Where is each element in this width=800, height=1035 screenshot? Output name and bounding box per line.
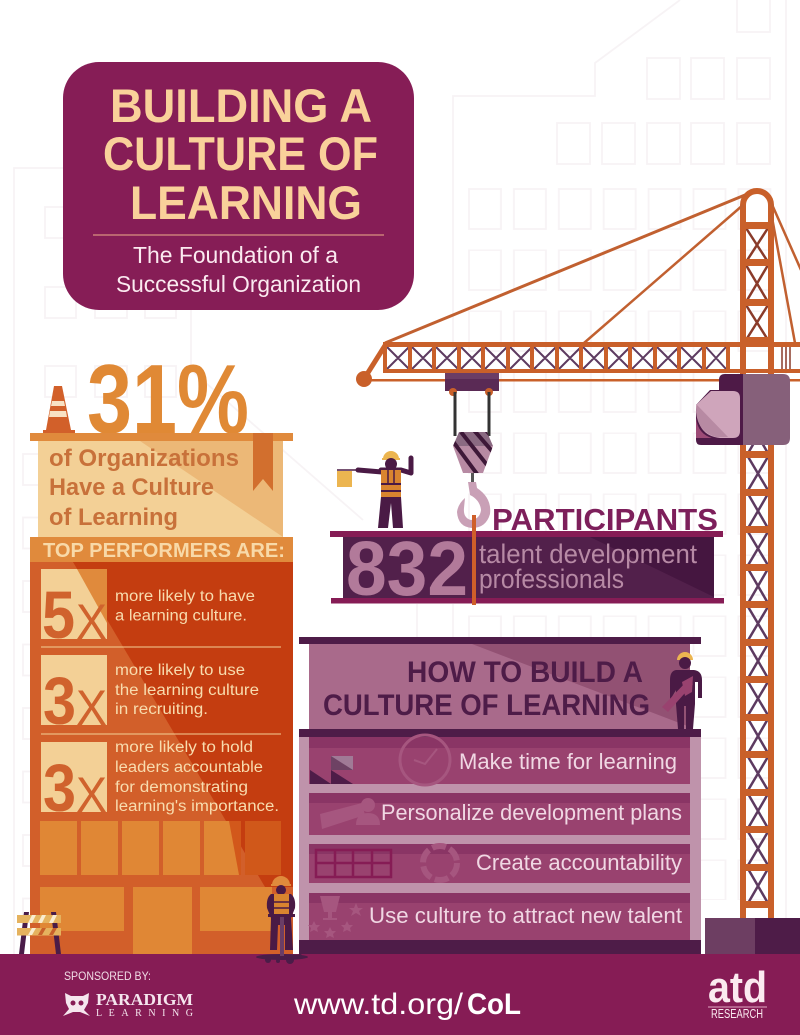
panel: top performers [30,537,293,956]
crane cab [696,374,790,445]
how-to heading: HOW TO BUILD A [407,656,643,689]
step: personalize [309,793,690,835]
step: personalize: Personalize development plans [381,800,682,825]
stat: 5x [41,569,255,653]
subtitle [116,242,361,297]
how-to heading [323,656,650,722]
tower base [705,918,800,954]
website url: CoL [467,988,521,1021]
stat: 3x leaders: 3 [43,751,76,826]
stat: 3x recruiting: the learning culture [115,682,259,699]
sponsor logo: LEARNING [96,1008,193,1019]
stat: 3x recruiting: in recruiting. [115,701,208,718]
crane jib [356,342,800,387]
website url: www.td.org/ [293,988,464,1021]
participants girder [330,502,724,612]
how-to heading: CULTURE OF LEARNING [323,689,650,722]
step: accountability [309,844,690,883]
subtitle: The Foundation of a [133,242,338,268]
stat: 5x: a learning culture. [115,608,247,624]
step: attract talent: Use culture to attract new talent [369,903,682,928]
statistic description: of Learning [49,504,178,531]
step: make time [309,735,690,785]
crane tower [743,191,773,920]
step: accountability: Create accountability [476,850,682,875]
step: make time: Make time for learning [459,749,677,774]
stat: 3x recruiting: more likely to use [115,662,245,679]
participants description: talent development [479,539,697,569]
sponsor logo: PARADIGM [96,990,193,1009]
icon: flag worker [337,451,411,528]
atd logo: atd [708,963,767,1012]
stat: 3x leaders: more likely to hold [115,739,253,756]
sponsor label: SPONSORED BY: [64,969,151,983]
title heading [103,79,378,229]
step: attract talent [308,893,690,940]
panel: 31 percent [30,344,293,537]
participants number: 832 [346,526,468,612]
title panel [63,62,414,310]
statistic description: of Organizations [49,445,239,472]
title heading: CULTURE OF [103,127,378,180]
stat: 3x recruiting [41,655,259,739]
participants heading: PARTICIPANTS [492,502,718,537]
panel: how to build [299,637,701,954]
participants description [479,539,697,594]
big statistic: 31% [87,344,249,454]
participants description: professionals [479,564,624,594]
ribbon [253,433,273,491]
sponsor logo [63,990,193,1019]
building windows [40,821,281,954]
stat: 5x: more likely to have [115,588,255,605]
stat: 3x leaders: learning's importance. [115,798,279,815]
icon: traffic cone [43,386,75,433]
stat: 3x leaders: leaders accountable [115,759,263,776]
stat: 3x recruiting: X [76,680,107,736]
icon: jackhammer worker [256,876,308,964]
icon: crane hook [457,482,490,528]
statistic description [49,445,239,531]
stat: 5x: 5 [42,578,75,653]
title heading: LEARNING [130,176,362,229]
icon: owl [63,993,90,1016]
title heading: BUILDING A [110,79,372,132]
stat: 3x leaders: for demonstrating [115,779,248,796]
subtitle: Successful Organization [116,271,361,297]
statistic description: Have a Culture [49,474,214,501]
stat: 3x leaders [41,739,279,826]
crane cables [385,195,800,343]
crane [356,191,800,920]
icon: barricade [17,912,61,954]
stat: 3x leaders: X [76,767,107,823]
stat: 3x recruiting: 3 [43,664,76,739]
stat: 5x: X [76,594,107,650]
banner heading: TOP PERFORMERS ARE: [43,540,285,562]
footer band [0,954,800,1035]
website url [293,988,521,1021]
hook assembly [445,373,499,531]
atd logo: RESEARCH [711,1007,763,1021]
icon: worker with blueprint [662,652,702,729]
